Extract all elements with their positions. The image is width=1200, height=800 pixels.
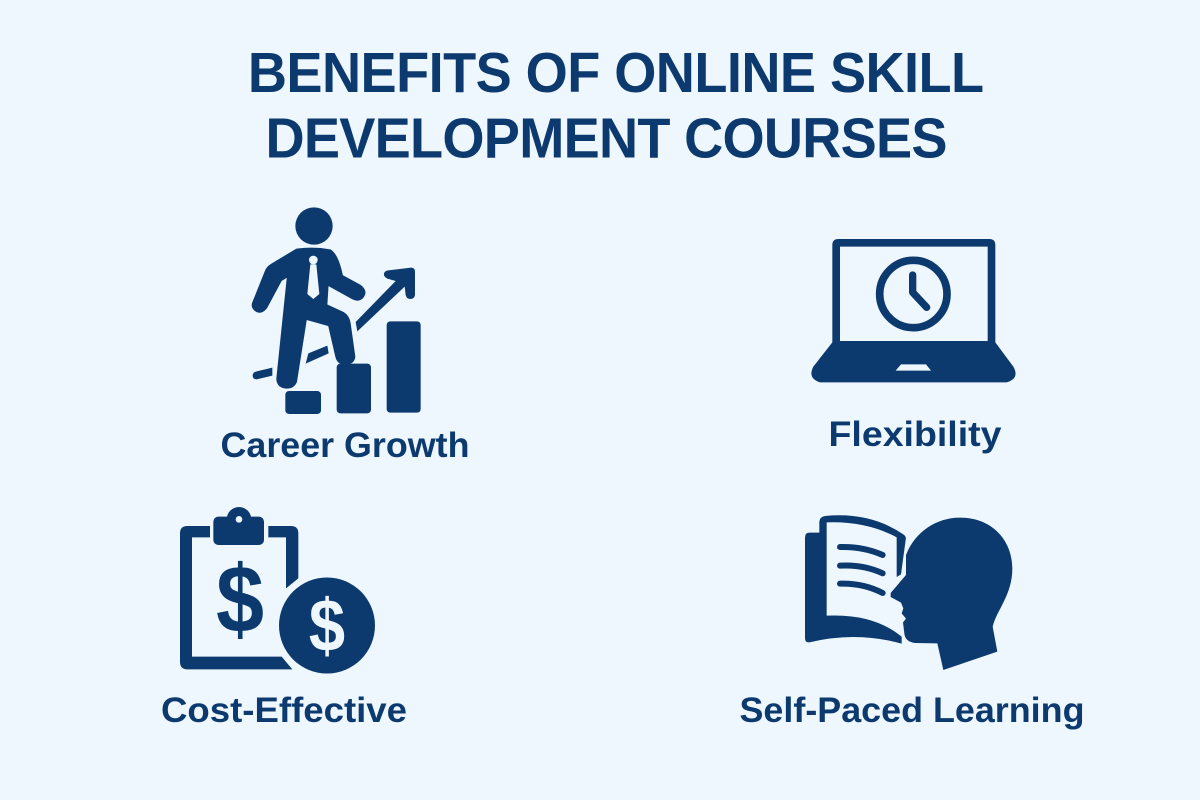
icon: open book and head [805,515,1012,670]
icon: clipboard with dollar coin: $ [216,546,264,653]
label: Self-Paced Learning: Self-Paced Learning [740,691,1084,730]
panel: flexibility [811,239,1016,454]
panel: self-paced learning [740,515,1084,730]
panel: cost-effective [161,507,407,730]
title [248,41,984,170]
panel: career growth [220,207,470,465]
title: DEVELOPMENT COURSES [265,106,948,170]
label: Career Growth: Career Growth [220,426,470,465]
label: Cost-Effective: Cost-Effective [161,691,407,730]
label: Flexibility: Flexibility [828,415,1002,454]
icon: climbing businessman with chart [253,207,421,414]
icon: laptop with clock [811,239,1016,382]
title: BENEFITS OF ONLINE SKILL [248,41,984,104]
icon: clipboard with dollar coin [180,507,375,674]
icon: clipboard with dollar coin: $ [309,584,345,667]
